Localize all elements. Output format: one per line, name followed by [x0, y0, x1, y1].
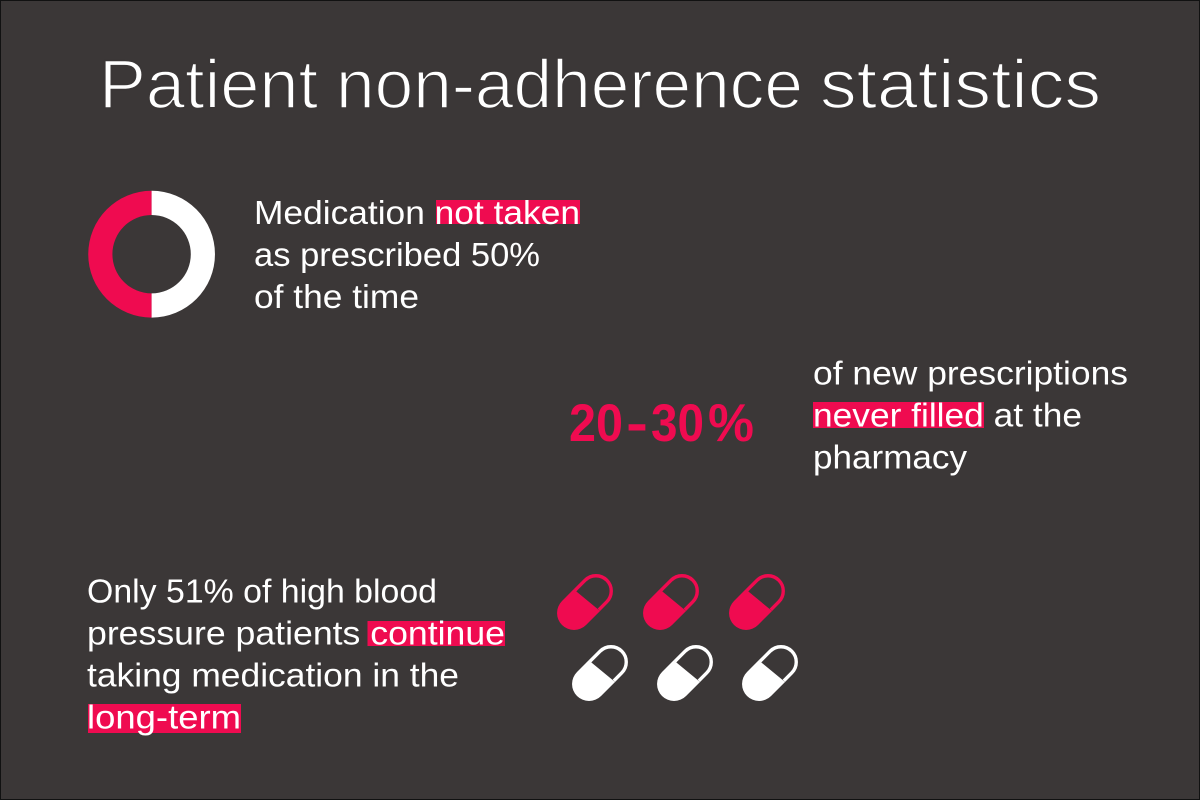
text block: new prescriptions never filled — [813, 356, 1128, 476]
text block: blood pressure patients: taking medication in the — [87, 658, 459, 694]
text block: medication not taken: Medication not taken — [254, 195, 580, 232]
text block: blood pressure patients — [87, 574, 505, 736]
statistic: 20-30%: - — [626, 394, 648, 453]
pill icons: white row — [565, 639, 804, 708]
statistic: 20-30%: 30 — [651, 394, 704, 453]
text block: blood pressure patients: Only 51% of high blood — [87, 574, 437, 610]
statistic: 20-30% — [569, 394, 754, 453]
title: statistics — [820, 46, 1101, 123]
title: Patient — [99, 46, 318, 123]
text block: medication not taken — [254, 195, 580, 316]
text block: blood pressure patients: pressure patients continue — [87, 616, 505, 652]
title: non-adherence — [336, 46, 803, 123]
text block: new prescriptions never filled: pharmacy — [813, 440, 967, 476]
pill icons: red row — [550, 568, 791, 637]
text block: medication not taken: as prescribed 50% — [254, 237, 540, 274]
statistic: 20-30%: 20 — [569, 394, 623, 453]
title — [99, 46, 1101, 123]
text block: medication not taken: of the time — [254, 279, 419, 316]
text block: new prescriptions never filled: never filled at the — [813, 398, 1082, 434]
text block: blood pressure patients: long-term — [87, 700, 241, 736]
text block: new prescriptions never filled: of new prescriptions — [813, 356, 1128, 392]
statistic: 20-30%: % — [708, 394, 754, 453]
donut chart: 50% — [88, 191, 215, 318]
